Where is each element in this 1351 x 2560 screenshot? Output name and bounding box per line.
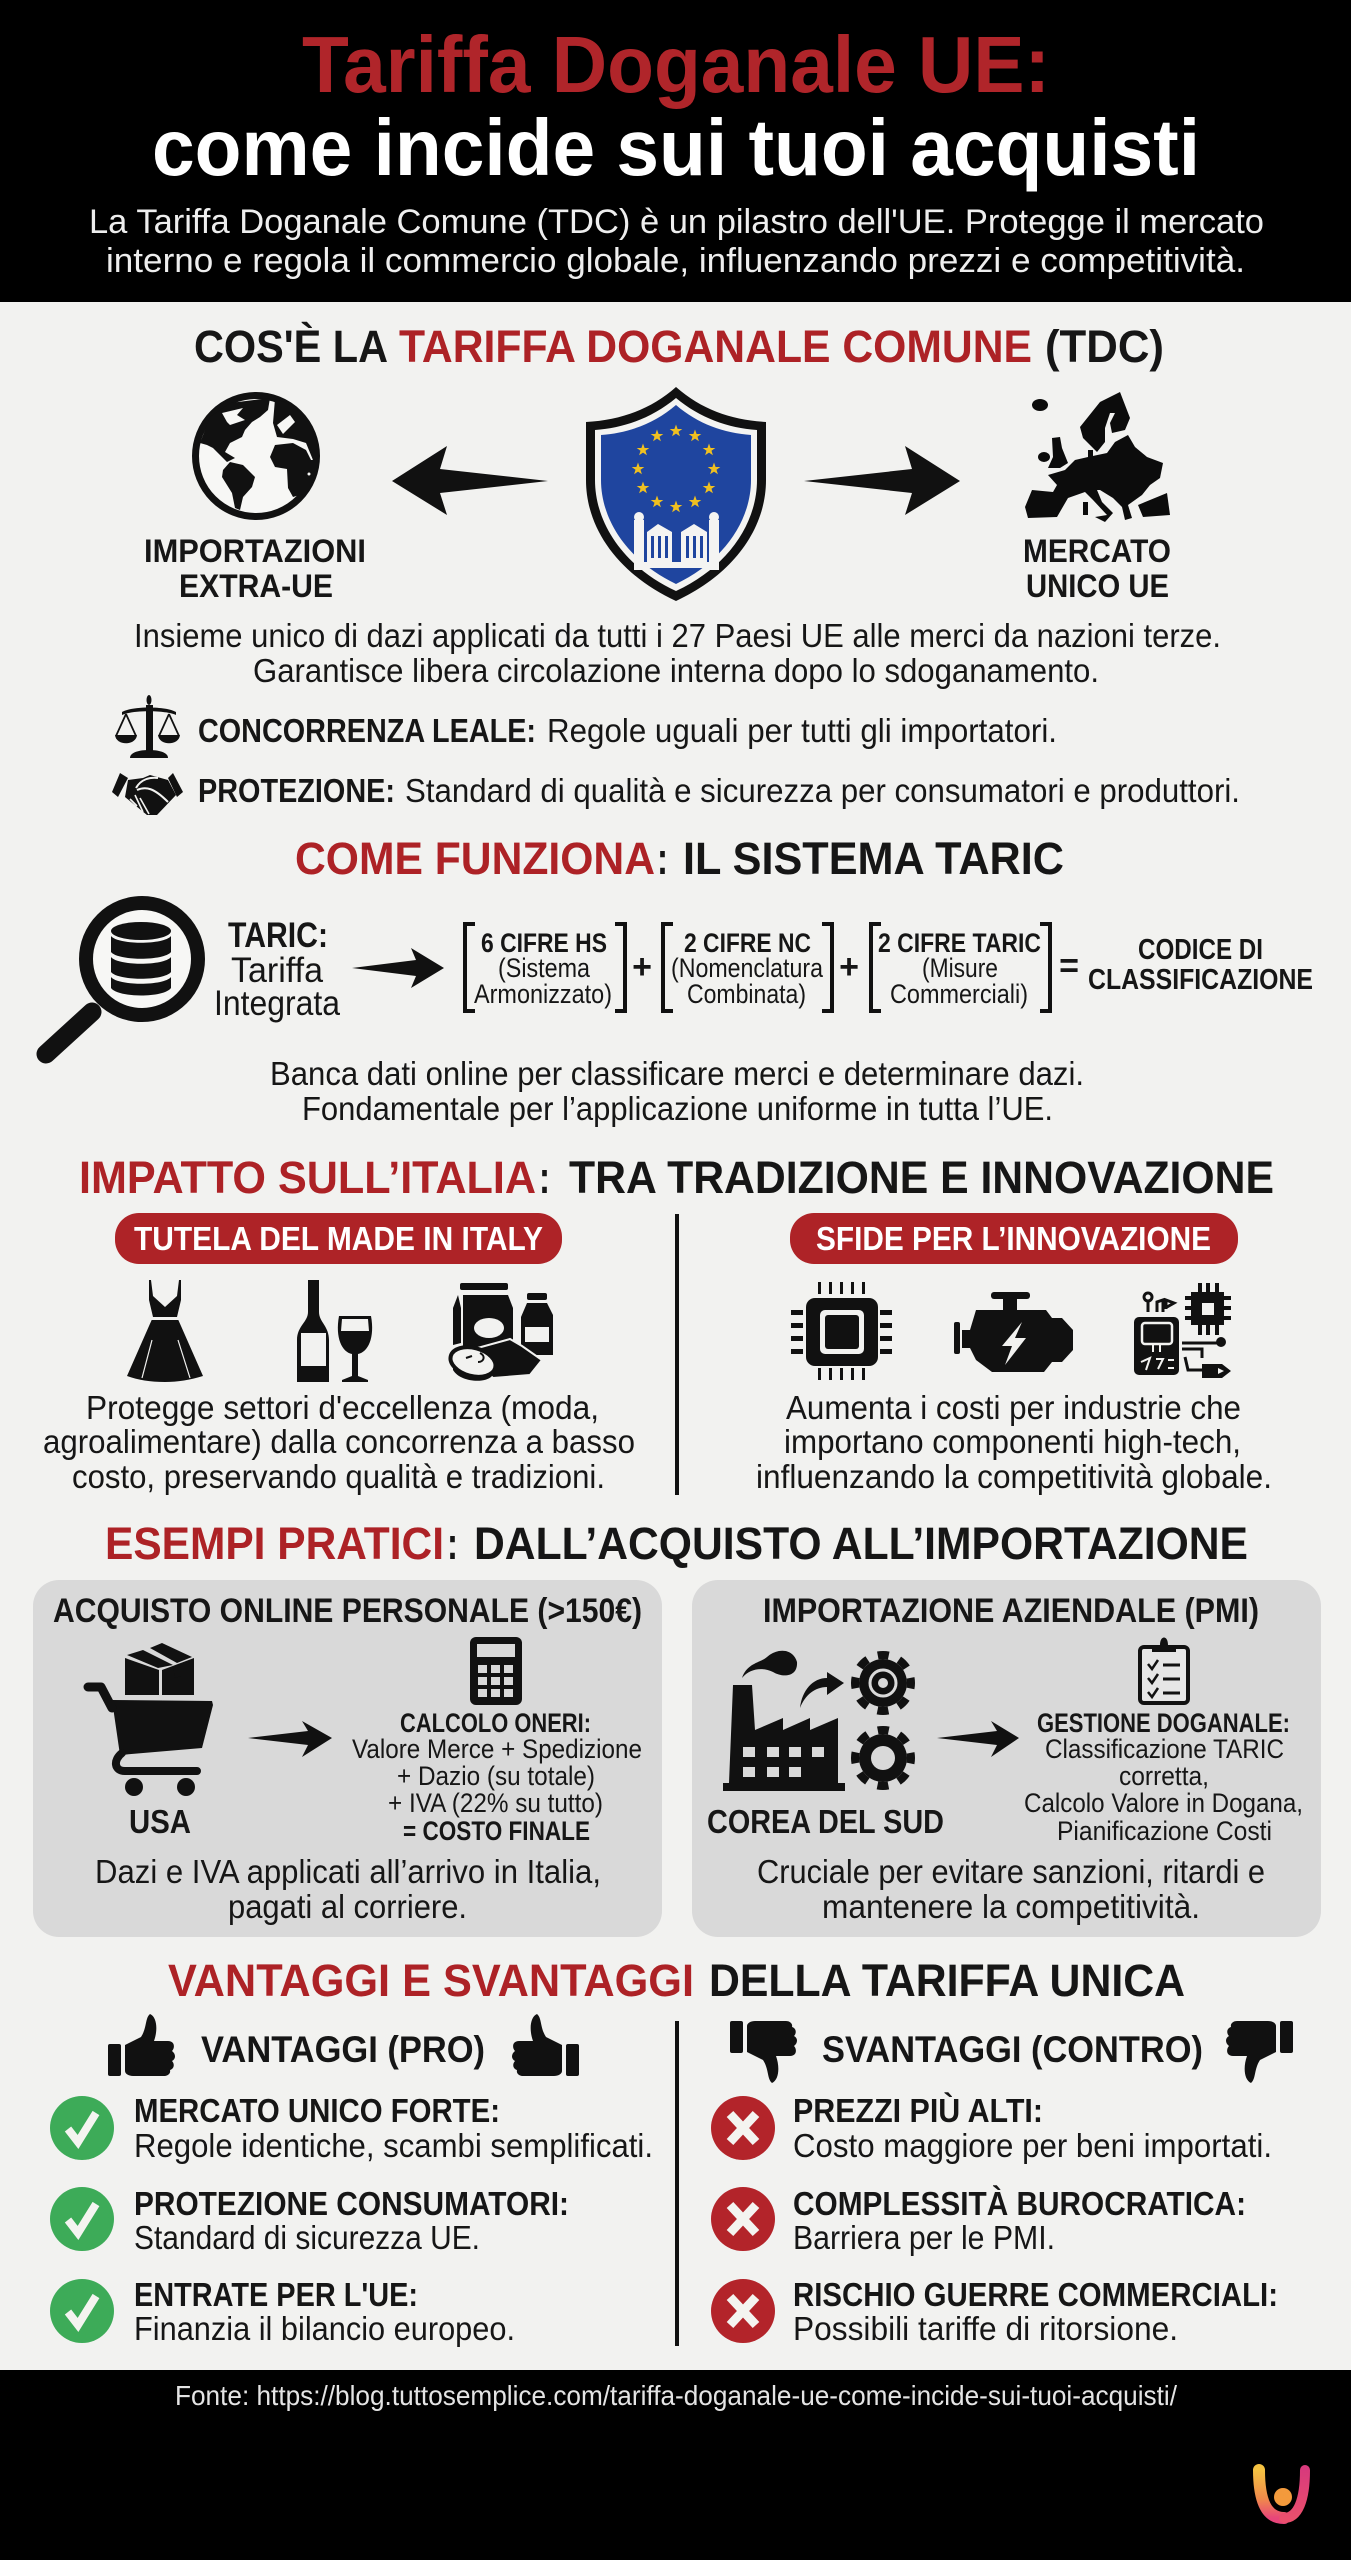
contro: prezzi più alti: Costo maggiore per beni importati. [793, 2127, 1272, 2164]
panel note: Dazi e IVA applicati all’arrivo in Italia, [95, 1853, 601, 1890]
heading: vantaggi e svantaggi: DELLA TARIFFA UNICA [709, 1955, 1185, 2006]
column header: svantaggi [730, 2021, 1293, 2083]
contro: rischio guerre commerciali [711, 2276, 1278, 2347]
icon: EU shield with gate [586, 387, 766, 601]
contro: prezzi più alti [711, 2092, 1272, 2164]
bullet: concorrenza leale: CONCORRENZA LEALE: [198, 712, 536, 749]
icon: dress [127, 1280, 203, 1382]
heading: come funziona [295, 833, 1064, 884]
label: TARIC: Tariffa [231, 951, 324, 990]
source: Fonte: https://blog.tuttosemplice.com/tariffa-doganale-ue-come-incide-sui-tuoi-acquisti/ [175, 2380, 1177, 2411]
contro: rischio guerre commerciali: Possibili tariffe di ritorsione. [793, 2310, 1178, 2347]
arrow: right [804, 446, 960, 515]
subtitle: interno e regola il commercio globale, influenzando prezzi e competitività. [106, 242, 1245, 280]
title [152, 20, 1200, 192]
arrow: left [392, 446, 548, 515]
icon: cart with box [88, 1643, 213, 1796]
code block: 2 cifre NC [663, 924, 832, 1011]
intro text: Garantisce libera circolazione interna dopo lo sdoganamento. [253, 652, 1099, 689]
heading: esempi pratici [105, 1518, 1248, 1569]
text: tutela: agroalimentare) dalla concorrenza a basso [43, 1423, 635, 1460]
TARIC description: Banca dati online per classificare merci e determinare dazi. [270, 1055, 1084, 1092]
gestione doganale: Pianificazione Costi [1057, 1816, 1272, 1846]
contro: complessità burocratica [711, 2185, 1246, 2256]
pro: protezione consumatori: Standard di sicurezza UE. [134, 2219, 480, 2256]
pill: sfide per l'innovazione [790, 1213, 1238, 1264]
icon: thumb down mirrored [1226, 2021, 1293, 2083]
pro: protezione consumatori: PROTEZIONE CONSUMATORI: [134, 2185, 569, 2222]
heading: vantaggi e svantaggi: VANTAGGI E SVANTAGGI [168, 1955, 694, 2006]
arrow [248, 1721, 332, 1757]
icon: globe [196, 396, 319, 516]
code block: 2 cifre TARIC: (Misure [922, 953, 998, 983]
label: USA: USA [129, 1803, 191, 1840]
calcolo oneri: + IVA (22% su tutto) [388, 1788, 603, 1818]
heading: impatto sull'Italia: TRA TRADIZIONE E INNOVAZIONE [569, 1152, 1274, 1203]
text: sfide: importano componenti high-tech, [784, 1423, 1241, 1460]
calcolo oneri [352, 1708, 642, 1846]
divider [675, 2021, 679, 2346]
heading: come funziona: : [657, 833, 668, 884]
pro: mercato unico forte: Regole identiche, scambi semplificati. [134, 2127, 653, 2164]
heading: impatto sull'Italia: IMPATTO SULL’ITALIA [79, 1152, 536, 1203]
arrow [937, 1721, 1019, 1757]
calcolo oneri: + Dazio (su totale) [397, 1761, 595, 1791]
panel: acquisto online [33, 1580, 662, 1937]
heading: cos'è la TDC [194, 321, 1164, 372]
panel title: IMPORTAZIONE AZIENDALE (PMI) [763, 1592, 1259, 1630]
code block: 2 cifre TARIC [871, 924, 1050, 1011]
gestione doganale: GESTIONE DOGANALE: [1037, 1708, 1290, 1738]
heading: cos'è la TDC: (TDC) [1045, 321, 1164, 372]
calcolo oneri: Valore Merce + Spedizione [352, 1734, 642, 1764]
code block: 2 cifre TARIC: 2 CIFRE TARIC [878, 928, 1041, 958]
code block: 2 cifre NC: (Nomenclatura [671, 953, 824, 983]
icon: map of Europe [1025, 392, 1170, 522]
heading: cos'è la TDC: TARIFFA DOGANALE COMUNE [399, 321, 1032, 372]
subtitle: La Tariffa Doganale Comune (TDC) è un pilastro dell'UE. Protegge il mercato [89, 203, 1264, 241]
icon: microchip [791, 1282, 892, 1380]
label: codice di classificazione: CLASSIFICAZIONE [1088, 964, 1313, 996]
label: importazioni extra-UE: IMPORTAZIONI [144, 533, 366, 569]
code block: 2 cifre NC: Combinata) [687, 979, 806, 1009]
calcolo oneri: = COSTO FINALE [403, 1816, 590, 1846]
pill: sfide per l'innovazione: SFIDE PER L’INNOVAZIONE [816, 1220, 1211, 1257]
logo [1259, 2470, 1305, 2518]
bullet: protezione: PROTEZIONE: [198, 772, 395, 809]
intro text [134, 617, 1221, 689]
code block: 6 cifre HS: (Sistema [498, 953, 591, 983]
text: tutela: Protegge settori d'eccellenza (moda, [86, 1389, 599, 1426]
header band [0, 0, 1351, 302]
title: Tariffa Doganale UE: [302, 20, 1050, 109]
label: TARIC: TARIC: [228, 916, 328, 955]
subtitle [89, 203, 1264, 280]
panel note: Cruciale per evitare sanzioni, ritardi e [757, 1853, 1265, 1890]
pro: entrate per l'UE: ENTRATE PER L'UE: [134, 2276, 418, 2313]
label: mercato unico UE: MERCATO [1023, 533, 1171, 569]
column header: svantaggi: SVANTAGGI (CONTRO) [822, 2029, 1203, 2070]
bullet: protezione: Standard di qualità e sicurezza per consumatori e produttori. [405, 772, 1240, 809]
gestione doganale: Calcolo Valore in Dogana, [1024, 1788, 1303, 1818]
bullet: concorrenza leale: Regole uguali per tutti gli importatori. [547, 712, 1057, 749]
contro: rischio guerre commerciali: RISCHIO GUERRE COMMERCIALI: [793, 2276, 1278, 2313]
panel title: ACQUISTO ONLINE PERSONALE (>150€) [53, 1592, 642, 1630]
text: tutela: costo, preservando qualità e tradizioni. [72, 1458, 605, 1495]
icon: calculator [470, 1637, 522, 1705]
icon: handshake [112, 773, 183, 815]
icon: engine [954, 1292, 1073, 1372]
column header: vantaggi [108, 2014, 579, 2076]
code block: 2 cifre NC: 2 CIFRE NC [684, 928, 811, 958]
icon: thumb up mirrored [512, 2014, 579, 2076]
code block: 6 cifre HS: Armonizzato) [474, 979, 612, 1009]
heading: impatto sull'Italia [79, 1152, 1274, 1203]
plus sign: + [632, 948, 652, 986]
arrow: TARIC to code [352, 948, 444, 988]
label: codice di classificazione: CODICE DI [1138, 934, 1263, 966]
pro: mercato unico forte: MERCATO UNICO FORTE: [134, 2092, 500, 2129]
TARIC description [270, 1055, 1084, 1127]
text: sfide [756, 1389, 1272, 1495]
label: TARIC [214, 916, 340, 1023]
icon: thumb up [108, 2014, 175, 2076]
text: tutela [43, 1389, 635, 1495]
heading: come funziona: COME FUNZIONA [295, 833, 655, 884]
icon: thumb down [730, 2021, 797, 2083]
icon: factory with gears [723, 1651, 911, 1791]
label: TARIC: Integrata [214, 984, 340, 1023]
heading: vantaggi e svantaggi [168, 1955, 1185, 2006]
code block: 6 cifre HS [465, 924, 625, 1011]
heading: esempi pratici: : [447, 1518, 458, 1569]
panel: importazione aziendale [692, 1580, 1321, 1937]
contro: complessità burocratica: Barriera per le PMI. [793, 2219, 1055, 2256]
code block: 2 cifre TARIC: Commerciali) [890, 979, 1028, 1009]
heading: impatto sull'Italia: : [539, 1152, 550, 1203]
footer band [0, 2370, 1351, 2560]
icon: scales [115, 695, 180, 758]
label: codice di classificazione [1088, 934, 1313, 996]
column header: vantaggi: VANTAGGI (PRO) [201, 2029, 485, 2070]
text: sfide: influenzando la competitività globale. [756, 1458, 1272, 1495]
calcolo oneri: CALCOLO ONERI: [400, 1708, 591, 1738]
heading: come funziona: IL SISTEMA TARIC [683, 833, 1064, 884]
pro: entrate per l'UE: Finanzia il bilancio europeo. [134, 2310, 515, 2347]
bullet: concorrenza leale [198, 712, 1057, 749]
panel note [95, 1853, 601, 1925]
heading: esempi pratici: DALL’ACQUISTO ALL’IMPORTAZIONE [474, 1518, 1248, 1569]
code block: 6 cifre HS: 6 CIFRE HS [481, 928, 607, 958]
equals sign: = [1059, 947, 1079, 985]
label: mercato unico UE: UNICO UE [1026, 568, 1169, 604]
pill: tutela del made in Italy [115, 1213, 562, 1264]
label: importazioni extra-UE: EXTRA-UE [179, 568, 333, 604]
icon: electronics [1134, 1283, 1231, 1378]
plus sign: + [839, 948, 859, 986]
contro: prezzi più alti: PREZZI PIÙ ALTI: [793, 2092, 1043, 2129]
intro text: Insieme unico di dazi applicati da tutti i 27 Paesi UE alle merci da nazioni terze. [134, 617, 1221, 654]
pro: protezione consumatori [50, 2185, 569, 2256]
title: come incide sui tuoi acquisti [152, 103, 1200, 192]
pro: mercato unico forte [50, 2092, 653, 2164]
label: importazioni extra-UE [144, 533, 366, 604]
panel note: pagati al corriere. [228, 1888, 467, 1925]
text: sfide: Aumenta i costi per industrie che [786, 1389, 1241, 1426]
pro: entrate per l'UE [50, 2276, 515, 2347]
heading: esempi pratici: ESEMPI PRATICI [105, 1518, 444, 1569]
icon: clipboard checklist [1140, 1638, 1188, 1703]
gestione doganale [1024, 1708, 1303, 1846]
TARIC description: Fondamentale per l’applicazione uniforme in tutta l’UE. [302, 1090, 1053, 1127]
panel note [757, 1853, 1265, 1925]
gestione doganale: Classificazione TARIC [1045, 1734, 1284, 1764]
contro: complessità burocratica: COMPLESSITÀ BUROCRATICA: [793, 2185, 1246, 2222]
label: mercato unico UE [1023, 533, 1171, 604]
panel note: mantenere la competitività. [822, 1888, 1200, 1925]
icon: magnifier with database [46, 903, 198, 1054]
icon: food products [447, 1283, 553, 1381]
icon: wine bottle and glass [297, 1280, 372, 1382]
heading: cos'è la TDC: COS'È LA [194, 321, 388, 372]
gestione doganale: corretta, [1119, 1761, 1209, 1791]
label: Corea del Sud: COREA DEL SUD [707, 1803, 944, 1840]
pill: tutela del made in Italy: TUTELA DEL MADE IN ITALY [134, 1220, 543, 1257]
divider [675, 1214, 679, 1495]
